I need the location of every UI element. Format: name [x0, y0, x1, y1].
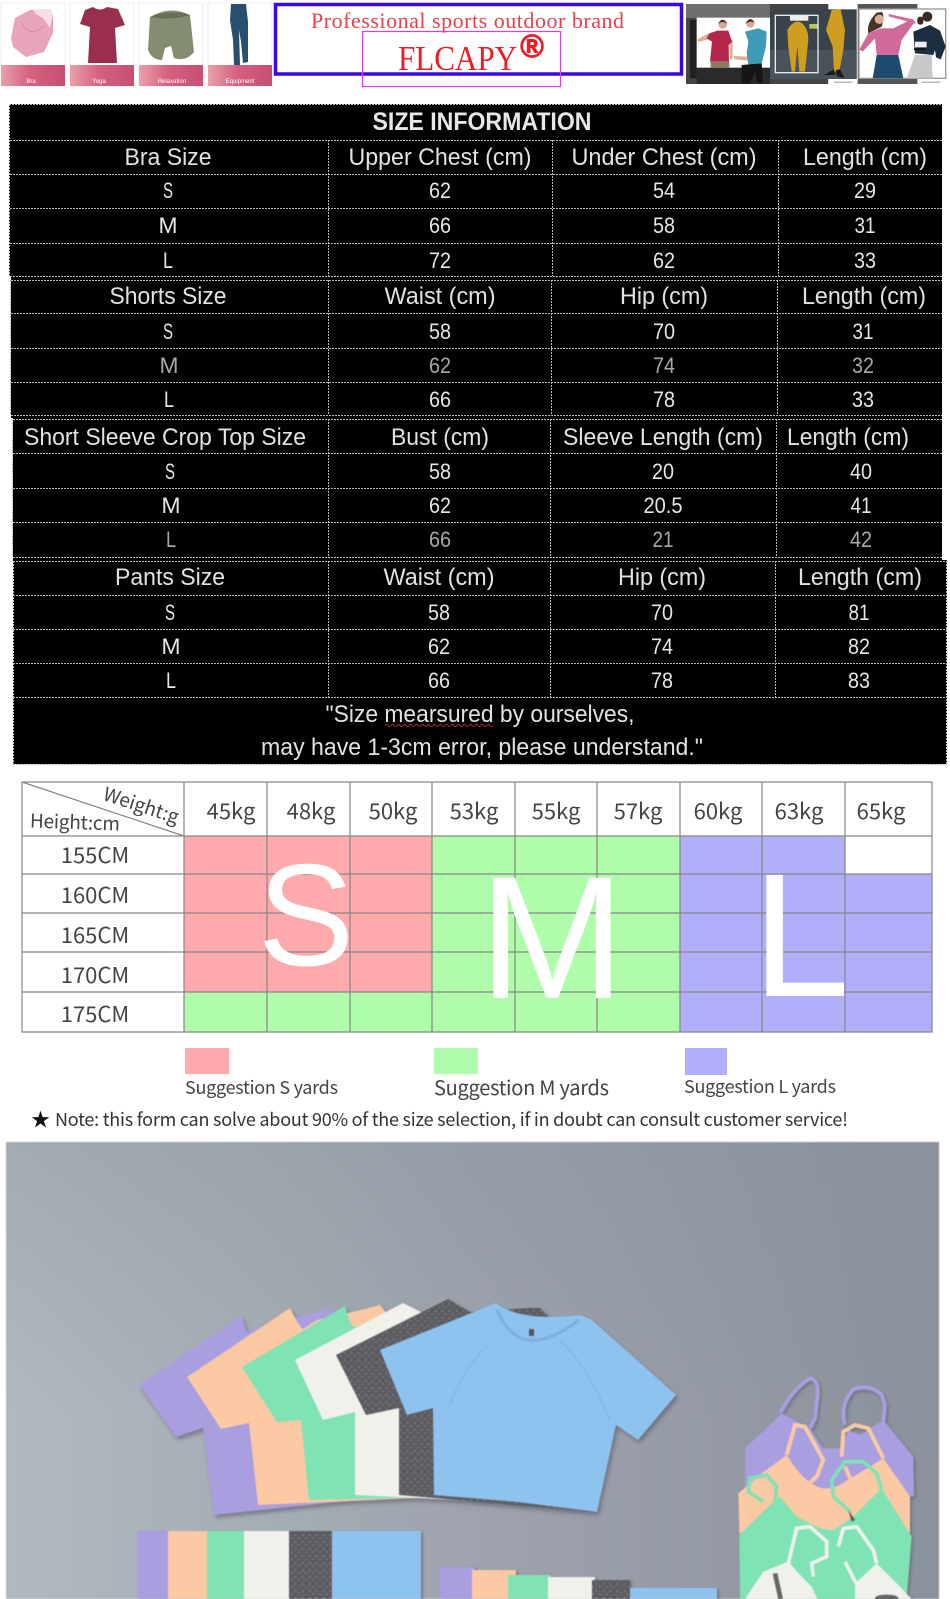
- shorts section: 33: [852, 387, 874, 412]
- bra section: 29: [854, 178, 876, 203]
- footnote: ★: [31, 1105, 50, 1132]
- crop top section: 58: [429, 459, 451, 484]
- legend: L: [684, 1048, 836, 1099]
- shorts section: Waist (cm): [384, 283, 496, 310]
- footnote: Note: this form can solve about 90% of the size selection, if in doubt can consult customer service!: [55, 1106, 848, 1132]
- weight labels: 45kg: [207, 794, 256, 826]
- pants section: Pants Size: [115, 564, 225, 591]
- bra section: M: [158, 213, 178, 238]
- legend: M: [434, 1048, 609, 1101]
- height labels: [61, 838, 129, 1029]
- registered mark: ®: [520, 28, 544, 64]
- height labels: 165CM: [61, 918, 129, 950]
- crop top section: 21: [652, 527, 674, 552]
- bra section: 72: [429, 248, 451, 273]
- table background: [9, 104, 947, 764]
- photo: long sleeve tops: [858, 4, 946, 84]
- weight labels: [207, 794, 906, 826]
- green bra: [739, 1462, 912, 1599]
- shorts section: 70: [653, 319, 675, 344]
- bra section: 58: [653, 213, 675, 238]
- category thumbnails: [1, 3, 272, 86]
- weight labels: 48kg: [287, 794, 336, 826]
- crop top section: Bust (cm): [391, 424, 489, 451]
- crop top section: 62: [429, 493, 451, 518]
- bra section: 66: [429, 213, 451, 238]
- pants section: Waist (cm): [384, 564, 494, 591]
- pants section: 70: [651, 600, 673, 625]
- crop top section: S: [165, 459, 175, 484]
- crop top section: 40: [850, 459, 872, 484]
- blue frame: [276, 4, 682, 74]
- bra section: 31: [854, 213, 876, 238]
- thumbnail: tee: Yoga: [92, 79, 106, 85]
- height labels: 170CM: [61, 958, 129, 990]
- photo background: [6, 1142, 939, 1599]
- model photos: [686, 4, 946, 84]
- height labels: 175CM: [61, 997, 129, 1029]
- crop top section: [12, 419, 942, 558]
- product photo: [6, 1142, 939, 1599]
- big size letters: S: [258, 834, 354, 996]
- legend: M: Suggestion M yards: [434, 1072, 609, 1101]
- brand name: FLCAPY: [398, 39, 517, 78]
- bra section: Length (cm): [803, 144, 927, 171]
- bra section: 54: [653, 178, 675, 203]
- size information table: [9, 104, 947, 764]
- height labels: 160CM: [61, 878, 129, 910]
- measurement note: [261, 701, 703, 761]
- crop top section: 20.5: [644, 493, 682, 518]
- bra section: 62: [653, 248, 675, 273]
- weight labels: 60kg: [694, 794, 743, 826]
- pants section: Length (cm): [798, 564, 922, 591]
- measurement note: "Size mearsured by ourselves,: [326, 701, 634, 728]
- folded shorts, middle stack: [440, 1567, 717, 1599]
- bra section: Under Chest (cm): [572, 144, 756, 171]
- bra section: Upper Chest (cm): [348, 144, 532, 171]
- pants section: L: [166, 668, 176, 693]
- pants section: 83: [848, 668, 870, 693]
- shorts section: 32: [852, 353, 874, 378]
- thumbnail: shorts: Relaxation: [158, 79, 186, 85]
- purple bra: [745, 1378, 914, 1497]
- crop top section: 20: [652, 459, 674, 484]
- weight labels: 50kg: [369, 794, 418, 826]
- tagline: Professional sports outdoor brand: [311, 8, 624, 33]
- photo: tees: [686, 4, 828, 84]
- white bra: [745, 1527, 912, 1599]
- pants section: S: [165, 600, 175, 625]
- height labels: 155CM: [61, 838, 129, 870]
- brand banner: [276, 4, 682, 86]
- thumbnail: bra: [1, 3, 65, 86]
- shorts section: 62: [429, 353, 451, 378]
- weight labels: 65kg: [857, 794, 906, 826]
- legend: S: [185, 1048, 338, 1100]
- shorts section: Shorts Size: [110, 283, 226, 310]
- big size letters: L: [752, 838, 850, 1034]
- photo: yellow leggings: [770, 9, 857, 84]
- folded shorts, left stack: [137, 1531, 421, 1599]
- crop top section: Short Sleeve Crop Top Size: [24, 424, 306, 451]
- weight and height size chart: [22, 780, 932, 1132]
- weight labels: 53kg: [450, 794, 499, 826]
- crop top section: 41: [850, 493, 872, 518]
- bra section: Bra Size: [124, 144, 212, 171]
- pants section: 66: [428, 668, 450, 693]
- bra section: 33: [854, 248, 876, 273]
- crop tees stack: [139, 1299, 676, 1515]
- bra section: [9, 104, 942, 276]
- crop top section: 42: [850, 527, 872, 552]
- pants section: 58: [428, 600, 450, 625]
- pants section: 74: [651, 634, 673, 659]
- bra section: 62: [429, 178, 451, 203]
- legend: L: Suggestion L yards: [684, 1073, 836, 1099]
- crop top section: 66: [429, 527, 451, 552]
- big size letters: [258, 834, 850, 1036]
- pants section: M: [162, 634, 180, 659]
- weight labels: 55kg: [532, 794, 581, 826]
- thumbnail: bra: Bra: [26, 79, 36, 85]
- thumbnail: leggings: [208, 3, 272, 86]
- pants section: Hip (cm): [618, 564, 706, 591]
- shorts section: 58: [429, 319, 451, 344]
- axis corner labels: Height:cm: [30, 806, 120, 837]
- axis corner labels: Weight:g: [100, 780, 183, 830]
- pants section: 62: [428, 634, 450, 659]
- pants section: [13, 561, 947, 764]
- shorts section: S: [163, 319, 173, 344]
- big size letters: M: [479, 841, 625, 1036]
- crop top section: Sleeve Length (cm): [563, 424, 763, 451]
- thumbnail: tee: [70, 3, 134, 86]
- table title: SIZE INFORMATION: [372, 108, 592, 136]
- crop top section: M: [162, 493, 180, 518]
- shorts section: [10, 280, 942, 416]
- legend: S: Suggestion S yards: [185, 1074, 338, 1100]
- crop top section: L: [166, 527, 176, 552]
- shorts section: Length (cm): [802, 283, 926, 310]
- pants section: 81: [848, 600, 870, 625]
- magenta frame: [362, 32, 560, 86]
- measurement note: may have 1-3cm error, please understand.": [261, 734, 703, 761]
- weight labels: 57kg: [614, 794, 663, 826]
- bra section: S: [163, 178, 173, 203]
- crop top section: Length (cm): [787, 424, 909, 451]
- orange bra: [738, 1425, 910, 1533]
- shorts section: 66: [429, 387, 451, 412]
- weight labels: 63kg: [775, 794, 824, 826]
- shorts section: 74: [653, 353, 675, 378]
- shorts section: 31: [852, 319, 874, 344]
- shorts section: 78: [653, 387, 675, 412]
- shorts section: M: [160, 353, 178, 378]
- thumbnail: shorts: [139, 3, 203, 86]
- bra section: L: [163, 248, 173, 273]
- shorts section: Hip (cm): [620, 283, 708, 310]
- pants section: 78: [651, 668, 673, 693]
- shorts section: L: [164, 387, 174, 412]
- axis corner labels: [30, 780, 183, 837]
- thumbnail: leggings: Equipment: [226, 79, 255, 85]
- size colour zones: [184, 836, 932, 1032]
- sports bras stack: [738, 1378, 914, 1599]
- pants section: 82: [848, 634, 870, 659]
